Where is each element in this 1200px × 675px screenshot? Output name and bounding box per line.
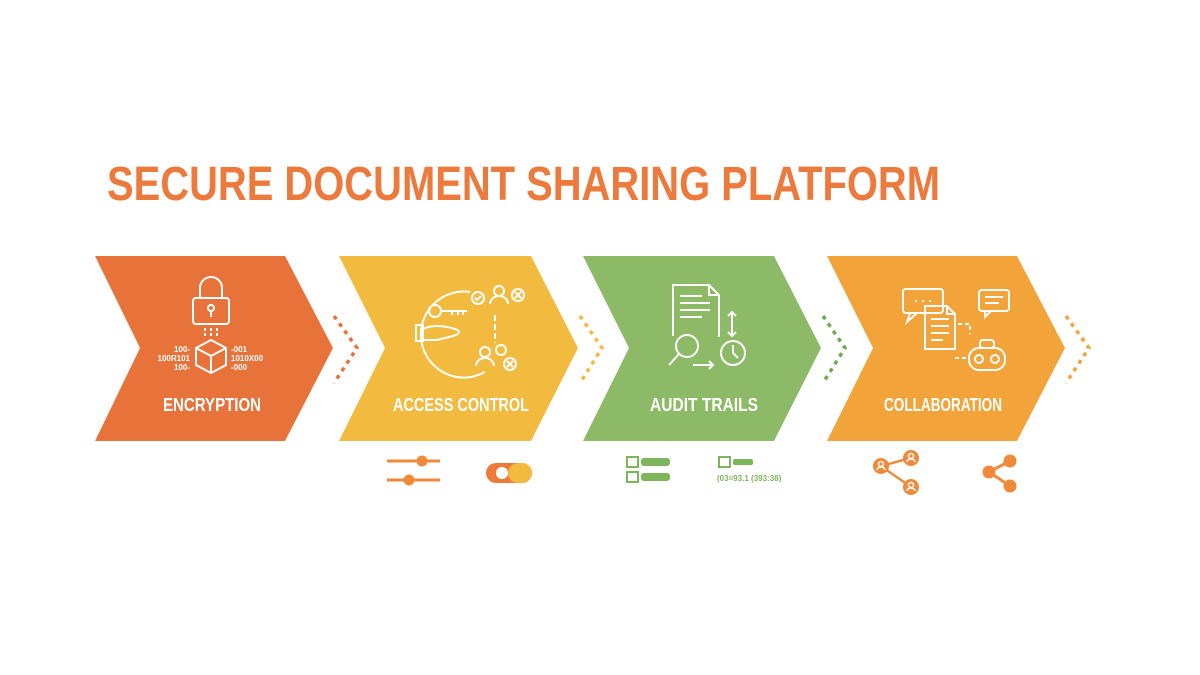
panel: encryption: -000 [231,363,248,372]
panel: encryption: 100- [174,363,190,372]
icon: document magnifier clock [669,285,745,369]
panel: encryption [95,256,333,441]
label: encryption: ENCRYPTION [163,395,261,415]
icon: toggle [486,463,532,483]
label: access control: ACCESS CONTROL [393,395,529,415]
arrow: dotted 2 [580,316,602,383]
icon: chat document users [903,289,1009,370]
panel: encryption: 1010X00 [231,354,264,363]
icon: checklist [627,457,669,482]
title: SECURE DOCUMENT SHARING PLATFORM [107,158,940,211]
label: collaboration: COLLABORATION [884,395,1002,415]
icon: log entry: (03=93.1 (393:38) [717,474,782,483]
arrow: dotted 1 [334,316,357,383]
icon: user network [873,450,919,495]
icon: key hand users [416,286,524,378]
icon: log entry [717,457,782,483]
panel: collaboration [827,256,1065,441]
panel: encryption: 100- [174,345,190,354]
panel: audit trails [583,256,821,441]
icon: lock with cube [193,277,229,373]
arrow: dotted 3 [823,316,845,383]
panel: encryption: -001 [231,345,248,354]
icon: share [984,456,1015,491]
icon: sliders [387,457,440,484]
label: audit trails: AUDIT TRAILS [650,395,758,415]
panel: access control [339,256,578,441]
arrow: dotted 4 [1066,316,1089,383]
panel: encryption: 100R101 [158,354,191,363]
